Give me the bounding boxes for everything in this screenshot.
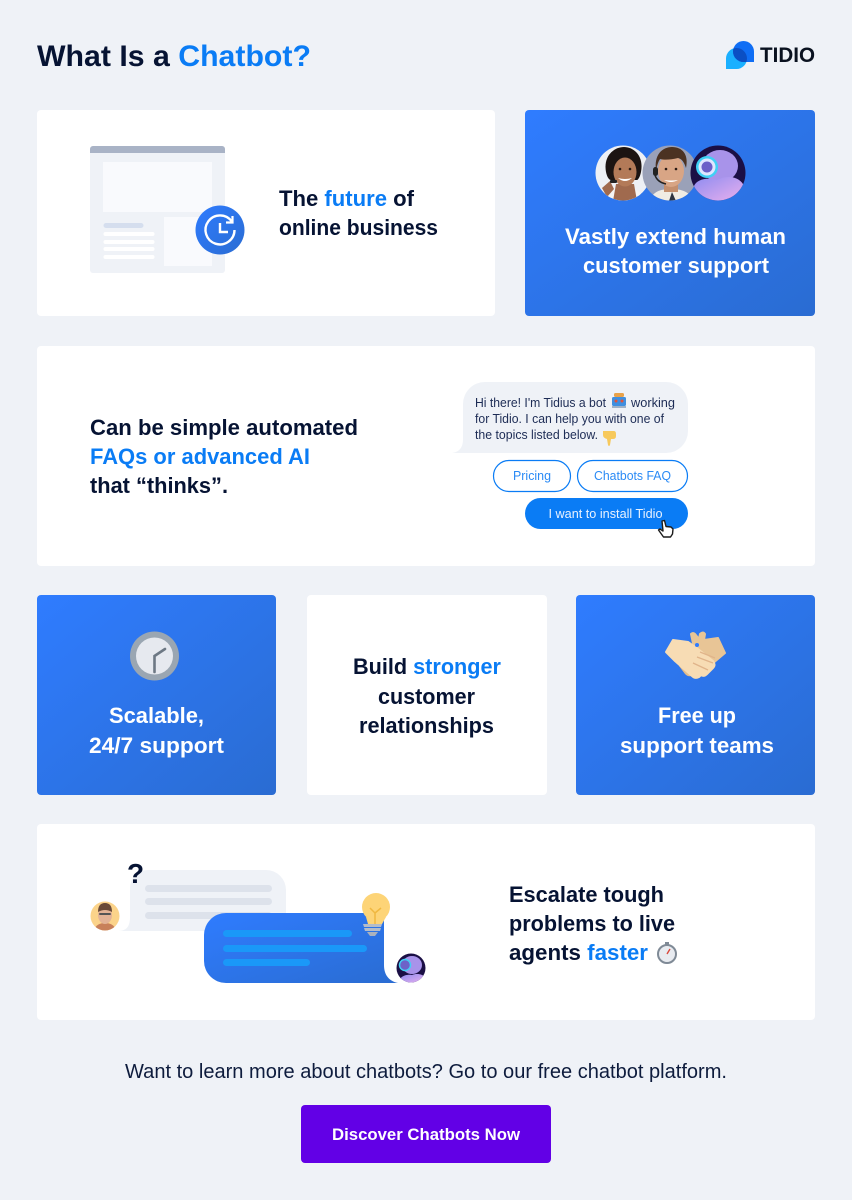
illustration: browser window with clock — [90, 146, 244, 273]
button: Chatbots FAQ — [578, 460, 688, 492]
text: escalate tough problems: agents faster — [509, 940, 648, 965]
icon: hand cursor — [658, 520, 673, 537]
panel: future of online business — [37, 110, 495, 316]
chat bubble: working — [630, 395, 675, 410]
chat bubble: the topics listed below. — [475, 427, 598, 442]
panel: free up support teams — [576, 595, 815, 795]
button: Pricing: Pricing — [513, 468, 551, 483]
text: stronger customer relationships: Build stronger — [353, 654, 501, 679]
icon: pointing down emoji — [603, 431, 616, 446]
button: Discover Chatbots Now — [301, 1105, 551, 1163]
text: free up support teams — [620, 703, 774, 758]
text: stronger customer relationships: relationships — [359, 713, 494, 738]
text: simple FAQs or advanced AI: FAQs or advanced AI — [90, 444, 310, 469]
text: simple FAQs or advanced AI: that “thinks”. — [90, 473, 228, 498]
text: stronger customer relationships — [353, 654, 501, 738]
button: Discover Chatbots Now: Discover Chatbots Now — [332, 1125, 521, 1144]
text: scalable 24/7 support: Scalable, — [109, 703, 204, 728]
text: future of online business — [279, 186, 438, 240]
text: future of online business: online business — [279, 215, 438, 240]
chat bubble: Hi there! I'm Tidius a bot — [475, 395, 606, 410]
panel: simple FAQs or advanced AI — [37, 346, 815, 566]
avatar: male agent — [642, 145, 698, 201]
button: Chatbots FAQ: Chatbots FAQ — [594, 468, 671, 483]
icon: handshake — [666, 632, 725, 678]
panel: extend human customer support — [525, 110, 815, 316]
text: escalate tough problems: problems to live — [509, 911, 675, 936]
text: future of online business: The future of — [279, 186, 415, 211]
avatar: female agent — [596, 146, 646, 200]
icon: stopwatch — [658, 942, 676, 963]
icon: robot emoji — [612, 393, 626, 408]
logo: Tidio — [726, 41, 815, 69]
button: Pricing — [494, 460, 570, 492]
icon: clock — [130, 632, 179, 680]
title: What Is a Chatbot? — [37, 40, 311, 73]
text: extend human customer support: Vastly extend human — [565, 224, 786, 249]
avatar: man with glasses — [90, 901, 120, 931]
button: I want to install Tidio: I want to install Tidio — [548, 506, 662, 521]
chat bubble — [452, 382, 688, 453]
text: extend human customer support: customer support — [583, 253, 770, 278]
footer prompt: Want to learn more about chatbots? Go to our free chatbot platform. — [125, 1061, 727, 1083]
text: escalate tough problems — [509, 882, 676, 965]
text: simple FAQs or advanced AI — [90, 415, 358, 498]
panel: escalate tough problems — [37, 824, 815, 1020]
text: stronger customer relationships: customer — [378, 684, 475, 709]
icon: light bulb — [362, 893, 390, 936]
panel: stronger customer relationships — [307, 595, 547, 795]
text: scalable 24/7 support — [89, 703, 225, 758]
avatar: robot — [396, 953, 426, 983]
text: extend human customer support — [565, 224, 786, 278]
text: scalable 24/7 support: 24/7 support — [89, 733, 225, 758]
blue answer bubble — [204, 913, 398, 983]
text: escalate tough problems: Escalate tough — [509, 882, 664, 907]
text: simple FAQs or advanced AI: Can be simple automated — [90, 415, 358, 440]
text: free up support teams: support teams — [620, 733, 774, 758]
chat bubble: for Tidio. I can help you with one of — [475, 411, 664, 426]
logo: Tidio: TIDIO — [760, 44, 815, 67]
button: I want to install Tidio — [525, 498, 688, 529]
illustration: chat escalation — [90, 858, 426, 983]
panel: scalable 24/7 support — [37, 595, 276, 795]
icon: question mark: ? — [127, 858, 144, 889]
avatar: robot — [690, 145, 746, 201]
grey question bubble — [118, 870, 286, 931]
text: free up support teams: Free up — [658, 703, 736, 728]
